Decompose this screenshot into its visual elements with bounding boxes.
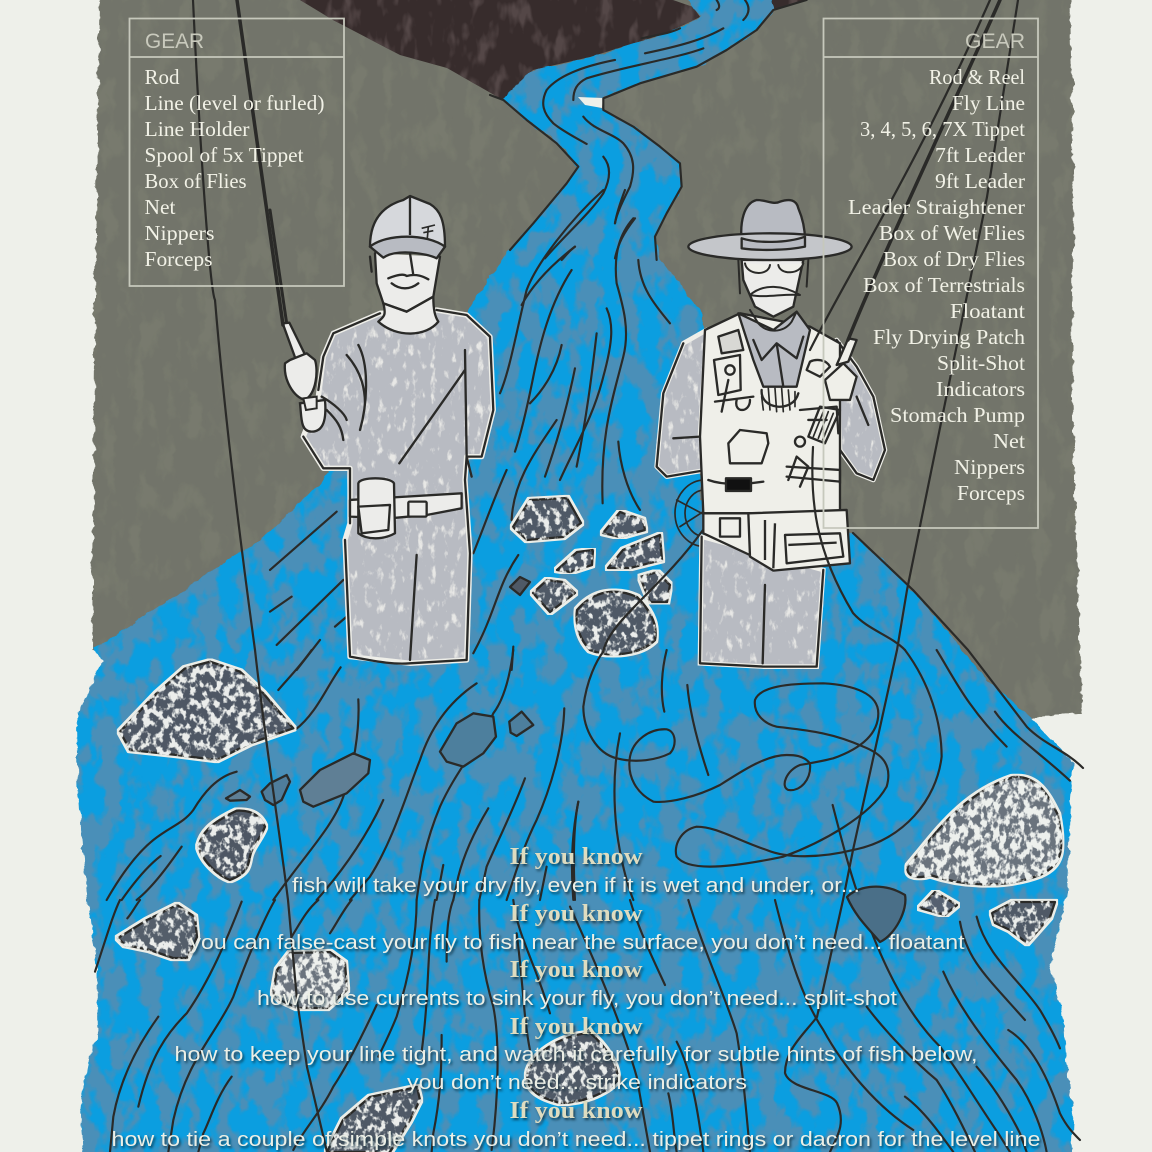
rock: upper 6 — [533, 580, 575, 612]
rock: left mid — [198, 811, 265, 880]
right thin line — [785, 0, 1018, 1152]
rock: upper 5 — [510, 577, 530, 595]
upper river lines — [490, 0, 807, 260]
fishing rods and fly lines — [193, 0, 1018, 1152]
gear panel: left angler — [130, 18, 344, 286]
wide-brim hat — [688, 200, 852, 260]
gear list: Net — [144, 195, 176, 219]
lower river lines, left — [107, 650, 578, 900]
rock: submerged small — [509, 712, 533, 736]
cap — [370, 196, 445, 258]
river glint — [578, 97, 603, 108]
face lines — [370, 253, 440, 312]
gear list — [144, 65, 324, 271]
gear list: Box of Wet Flies — [879, 221, 1025, 245]
if you know text block: If you know — [510, 957, 643, 983]
rock: submerged pebble — [262, 775, 290, 805]
gear list: Floatant — [950, 299, 1025, 323]
middle river lines — [270, 190, 670, 670]
rock: upper 3 — [608, 535, 662, 568]
vest — [700, 313, 840, 513]
right line from rod tip — [810, 0, 990, 350]
head — [375, 253, 440, 312]
gear list: Nippers — [144, 221, 214, 245]
line from vest to lower river — [812, 447, 905, 650]
gear list: 9ft Leader — [935, 169, 1025, 193]
right rod — [848, 0, 1000, 340]
rock: bottom left — [327, 1087, 420, 1152]
if you know text block: If you know — [510, 1014, 643, 1040]
gear list: Fly Drying Patch — [873, 325, 1026, 349]
rod grip and rod — [270, 210, 306, 360]
if you know text block: how to keep your line tight, and watch it carefully for subtle hints of fish below, — [174, 1044, 978, 1066]
rocks, page coordinates — [118, 498, 1061, 1152]
if you know text block: If you know — [510, 1098, 643, 1124]
lower river lines, right — [572, 650, 1070, 900]
left rod double line — [237, 0, 283, 325]
rock: left lower — [118, 905, 197, 958]
if you know text block: If you know — [510, 844, 643, 870]
gear list: Rod & Reel — [929, 65, 1025, 89]
line from hip across rocks — [603, 530, 703, 652]
gear list: Rod — [144, 65, 180, 89]
gear list: Box of Terrestrials — [863, 273, 1025, 297]
hands — [728, 338, 857, 463]
waders — [700, 537, 823, 667]
outline and folds — [303, 310, 493, 664]
gear list: Nippers — [954, 455, 1025, 479]
lower river lines, bottom right — [570, 900, 1080, 1152]
rock: bottom centre — [527, 1033, 618, 1103]
gear list: Box of Flies — [144, 169, 246, 193]
if you know text block — [112, 844, 1040, 1151]
rock: upper 4 — [557, 550, 593, 572]
dark distant mountain — [300, 0, 807, 100]
rock: upper 2 — [603, 512, 645, 537]
if you know text block: If you know — [510, 901, 643, 927]
gear list: Fly Line — [952, 91, 1025, 115]
fanny pack — [703, 510, 850, 571]
rock: pebble right — [920, 892, 957, 915]
rock: large left — [120, 662, 293, 760]
shirt and collar — [738, 312, 810, 387]
forearm and hand — [285, 353, 325, 432]
waist pouch and belt — [350, 478, 462, 538]
landing net — [675, 480, 735, 547]
rocks, left group — [120, 662, 533, 880]
head — [742, 260, 803, 317]
rock: small pebble — [226, 790, 250, 801]
rock: slab — [300, 753, 370, 807]
rock: submerged right — [847, 887, 905, 942]
left thin line — [193, 0, 327, 1152]
vest pockets and gear — [708, 330, 840, 491]
if you know text block: how to use currents to sink your fly, you don’t need... split-shot — [257, 988, 898, 1010]
rock: large centre — [577, 592, 656, 654]
panel frame — [824, 18, 1038, 528]
panel heading: GEAR — [145, 30, 204, 53]
gear list: Forceps — [144, 247, 212, 271]
lower river lines, bottom left — [95, 900, 550, 1152]
neck and collar — [378, 297, 438, 334]
rock: upper 1 — [513, 498, 581, 540]
gear list: Leader Straightener — [848, 195, 1025, 219]
gear list: 7ft Leader — [935, 143, 1025, 167]
angler with cap — [270, 196, 493, 664]
arm outline — [657, 340, 885, 480]
sweater and trousers — [303, 310, 493, 663]
if you know text block: you don’t need... strike indicators — [407, 1072, 747, 1094]
gear list — [848, 65, 1026, 505]
gear list: Split-Shot — [937, 351, 1025, 375]
rock: large right — [907, 777, 1061, 884]
gear list: Line (level or furled) — [144, 91, 324, 115]
panel heading: GEAR — [965, 30, 1025, 53]
rock: upper 8 — [640, 572, 670, 602]
arms — [657, 330, 885, 480]
gear list: Stomach Pump — [890, 403, 1025, 427]
rock: submerged oval — [440, 713, 496, 767]
rock: right — [992, 902, 1055, 943]
if you know text block: fish will take your dry fly, even if it is wet and under, or... — [292, 875, 860, 897]
gear list: 3, 4, 5, 6, 7X Tippet — [860, 117, 1025, 141]
panel frame — [130, 18, 344, 286]
rock: mid left — [273, 952, 347, 1008]
gear list: Net — [993, 429, 1025, 453]
angler with wide-brim hat and vest — [657, 200, 885, 667]
gear panel: right angler — [824, 18, 1038, 528]
if you know text block: how to tie a couple of simple knots you don’t need... tippet rings or dacron for the level line — [112, 1129, 1040, 1151]
gear list: Spool of 5x Tippet — [144, 143, 304, 167]
mustache and glasses — [738, 260, 808, 331]
gear list: Box of Dry Flies — [883, 247, 1025, 271]
gear list: Indicators — [936, 377, 1025, 401]
mountain background — [92, 0, 1082, 716]
if you know text block: you can false-cast your fly to fish near the surface, you don’t need... floatant — [190, 932, 965, 954]
wader outline — [700, 537, 823, 667]
river bank line, right — [853, 533, 1083, 768]
looping fly line — [583, 650, 942, 867]
gear list: Line Holder — [144, 117, 250, 141]
gear list: Forceps — [957, 481, 1025, 505]
